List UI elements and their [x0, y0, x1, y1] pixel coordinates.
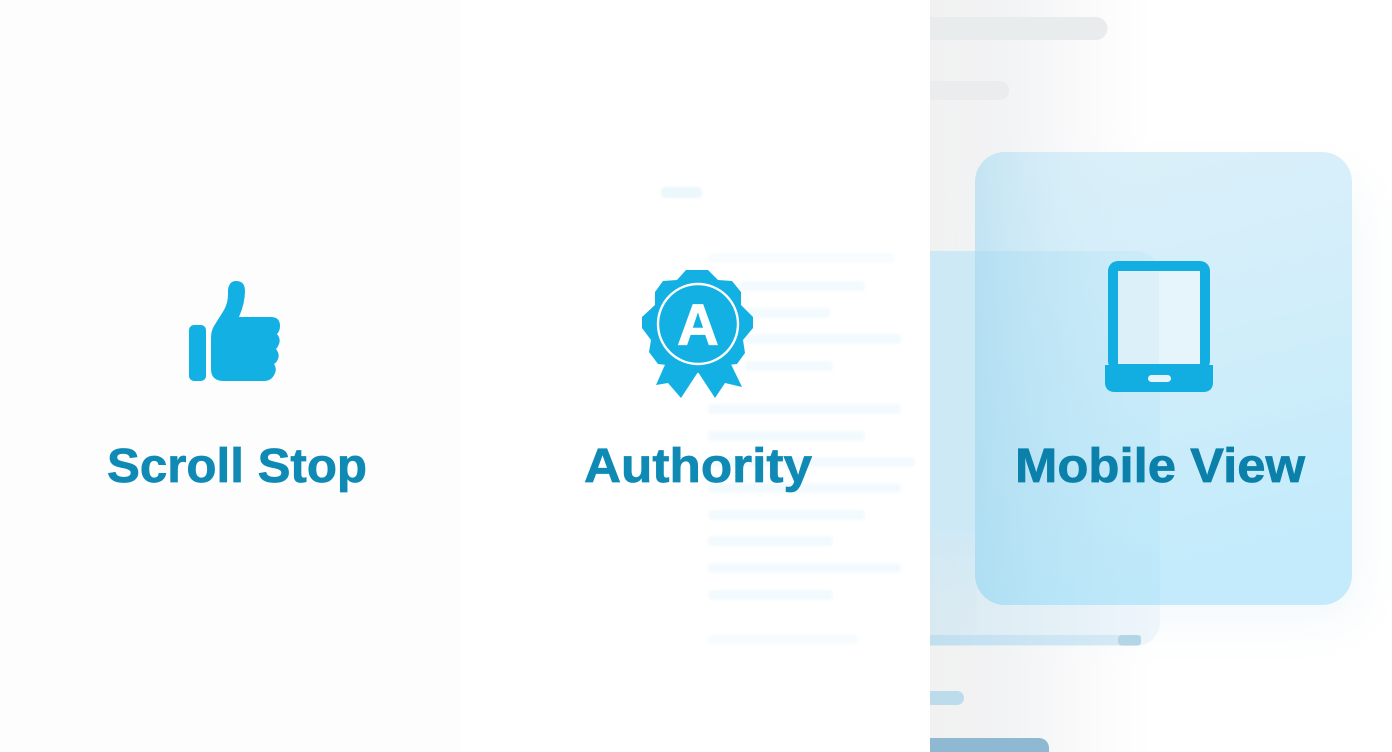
top placeholder bar: [930, 17, 1108, 40]
heading: scroll stop: Scroll Stop: [107, 440, 367, 493]
panel: scroll stop background: [0, 0, 461, 752]
heading: authority: Authority: [584, 440, 812, 493]
icon: tablet: [1105, 261, 1213, 392]
back card: [930, 251, 1160, 646]
lower light bar: [930, 691, 964, 705]
heading: mobile view: Mobile View: [1015, 440, 1306, 493]
second placeholder bar: [930, 81, 1009, 100]
soft glow behind card: [990, 175, 1362, 625]
lower dark bar: [930, 738, 1049, 752]
icon: award badge with letter A: A: [677, 293, 719, 358]
icon: thumbs up: [189, 281, 280, 381]
panel: mobile view background: [930, 0, 1392, 752]
front card: [975, 152, 1352, 605]
faint document lines behind authority: [661, 187, 915, 644]
panel: authority background: [461, 0, 930, 752]
icon: award badge with letter A: [642, 270, 753, 398]
